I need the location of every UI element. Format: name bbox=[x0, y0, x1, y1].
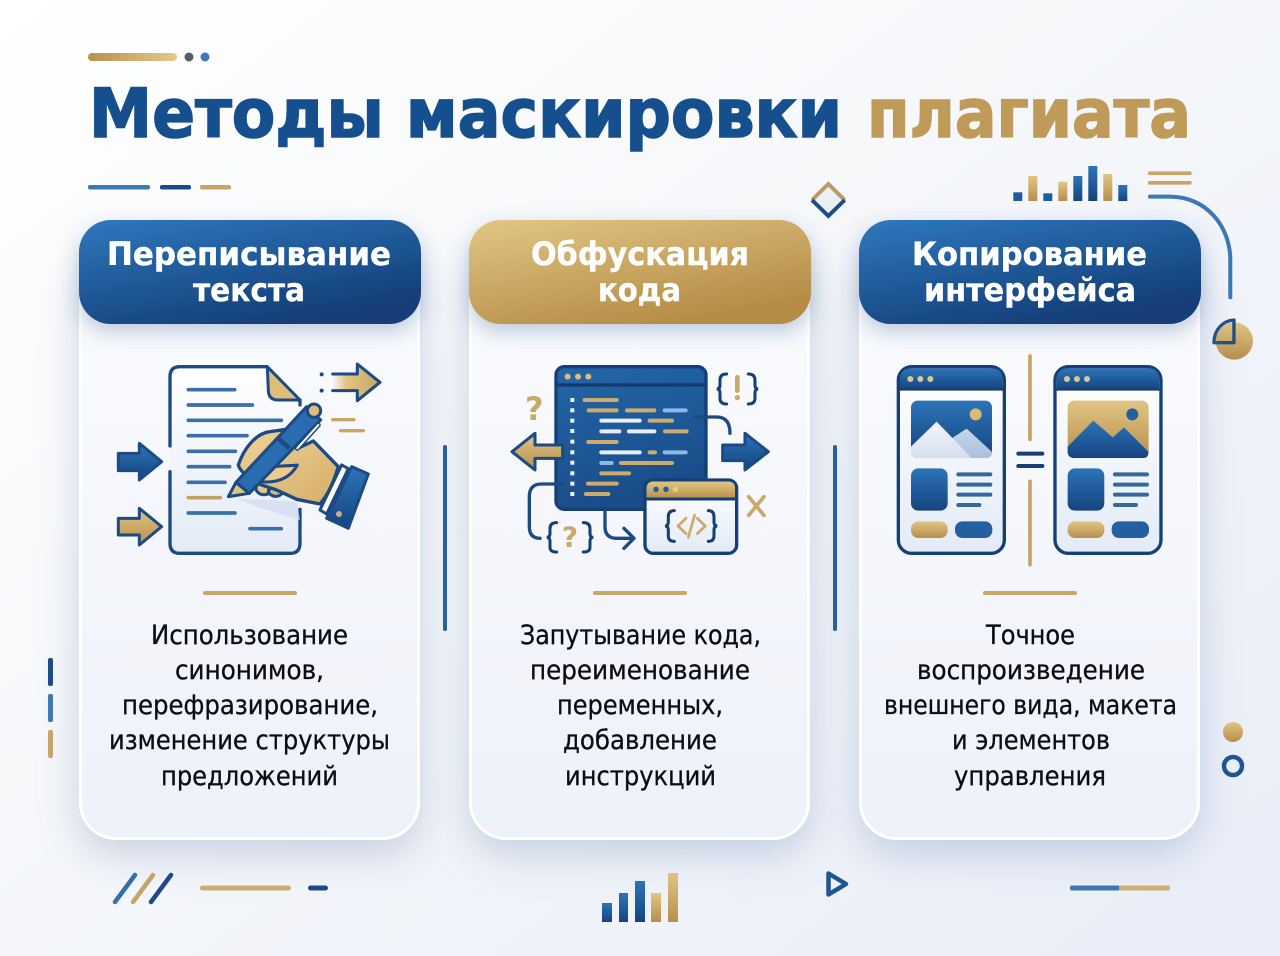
decoration: bottom lines bbox=[200, 886, 328, 890]
icon: code windows: ? bbox=[562, 521, 578, 554]
top accent bar and dots bbox=[88, 52, 210, 62]
description: внешнего вида, макета bbox=[884, 690, 1177, 721]
description bbox=[109, 620, 390, 792]
card header: интерфейса bbox=[924, 271, 1136, 309]
description: инструкций bbox=[565, 761, 716, 792]
card body bbox=[80, 240, 418, 838]
left screen bbox=[898, 367, 1004, 553]
description: синонимов, bbox=[175, 655, 324, 686]
description: изменение структуры bbox=[109, 725, 390, 756]
description: Запутывание кода, bbox=[520, 620, 761, 651]
card body bbox=[470, 240, 808, 838]
panel: code obfuscation bbox=[469, 220, 811, 838]
icon: code windows bbox=[512, 367, 768, 554]
pen bbox=[228, 482, 249, 497]
divider bbox=[983, 591, 1077, 595]
panel: interface copying bbox=[859, 220, 1201, 838]
description: переменных, bbox=[557, 690, 723, 721]
decoration: top right bars and curve bbox=[1013, 166, 1253, 360]
hand bbox=[238, 429, 338, 504]
description bbox=[520, 620, 761, 792]
description: предложений bbox=[161, 761, 338, 792]
description: Точное bbox=[985, 620, 1075, 651]
connector line 2 bbox=[833, 445, 837, 631]
description: перефразирование, bbox=[122, 690, 378, 721]
card header: Переписывание bbox=[107, 235, 391, 273]
card header bbox=[859, 220, 1201, 324]
card header: кода bbox=[598, 271, 681, 309]
description: воспроизведение bbox=[917, 655, 1145, 686]
divider bbox=[203, 591, 297, 595]
card header: текста bbox=[193, 271, 305, 309]
card header: Обфускация bbox=[531, 235, 749, 273]
title underline accents bbox=[88, 185, 231, 190]
lower fingers bbox=[256, 482, 283, 496]
card header: Копирование bbox=[912, 235, 1147, 273]
title: плагиата bbox=[867, 75, 1191, 154]
decoration: diamond bbox=[812, 184, 845, 216]
description: переименование bbox=[530, 655, 750, 686]
decoration: right circles bbox=[1223, 722, 1243, 775]
description: управления bbox=[954, 761, 1106, 792]
description bbox=[884, 620, 1177, 792]
description: добавление bbox=[563, 725, 717, 756]
card header bbox=[469, 220, 811, 324]
decoration: bottom bar chart bbox=[602, 873, 678, 922]
decoration: bottom right line bbox=[1070, 886, 1170, 890]
card header bbox=[79, 220, 421, 324]
card body bbox=[860, 240, 1198, 838]
icon: two identical interfaces bbox=[898, 356, 1161, 565]
divider bbox=[593, 591, 687, 595]
left side marks bbox=[48, 658, 53, 758]
title: Методы маскировки bbox=[89, 75, 842, 154]
connector line 1 bbox=[443, 445, 447, 631]
panel: rewriting text bbox=[79, 220, 421, 838]
icon: hand writing on document bbox=[118, 364, 380, 553]
description: и элементов bbox=[952, 725, 1110, 756]
right screen bbox=[1055, 367, 1161, 553]
decoration: play triangle bbox=[828, 874, 846, 894]
shirt cuff bbox=[320, 465, 348, 514]
description: Использование bbox=[151, 620, 348, 651]
icon: code windows: ? bbox=[525, 390, 544, 428]
decoration: bottom slashes bbox=[115, 875, 171, 902]
